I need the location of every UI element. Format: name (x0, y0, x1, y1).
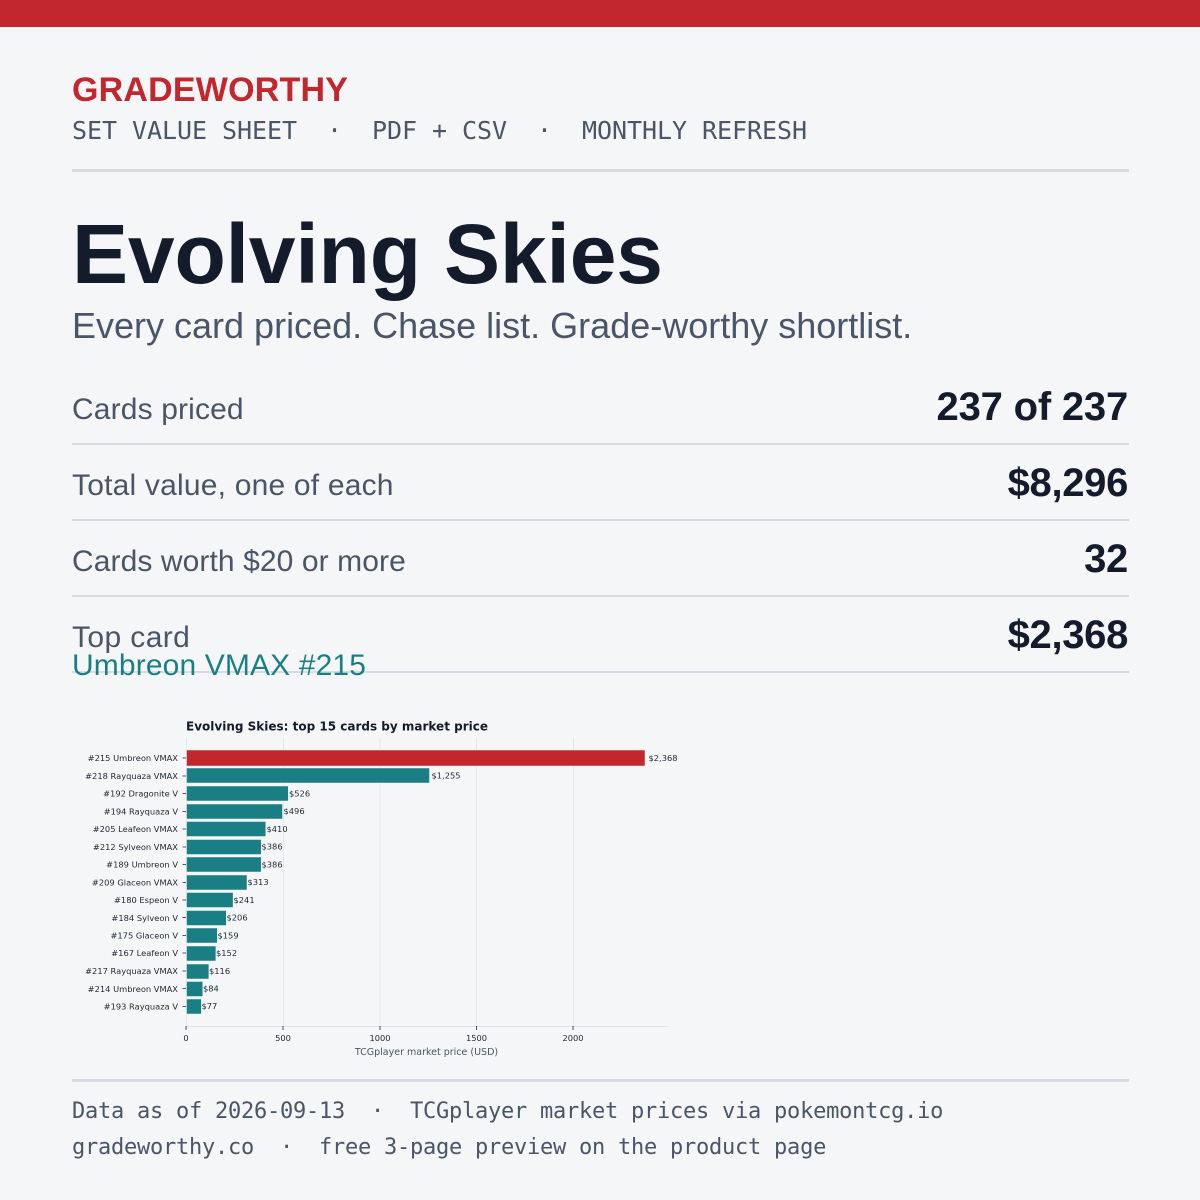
x-axis labels (183, 1033, 584, 1043)
y-axis labels: #180 Espeon V (114, 895, 178, 905)
bar value labels: $496 (284, 806, 305, 816)
bar value labels (202, 753, 678, 1011)
bars (186, 750, 645, 1014)
bar value labels: $410 (266, 824, 288, 834)
stat row: cards worth $20 or more: Cards worth $20 or more (72, 545, 406, 578)
y tick marks (182, 758, 573, 1030)
y-axis labels: #209 Glaceon VMAX (92, 878, 178, 888)
title: Evolving Skies (72, 207, 663, 301)
footer source line: Data as of 2026-09-13 · TCGplayer market prices via pokemontcg.io (72, 1099, 943, 1124)
subtitle: Every card priced. Chase list. Grade-worthy shortlist. (72, 305, 912, 346)
chart title: Evolving Skies: top 15 cards by market price (186, 720, 488, 734)
x-axis labels: 1000 (369, 1033, 391, 1043)
stat row: top card: Top card (72, 621, 190, 654)
bar value labels: $526 (289, 788, 310, 798)
y-axis labels (85, 753, 178, 1012)
bar value labels: $84 (203, 984, 219, 994)
y-axis labels: #194 Rayquaza V (104, 806, 178, 816)
bar value labels: $206 (226, 912, 248, 922)
y-axis labels: #217 Rayquaza VMAX (85, 966, 178, 976)
stat row: cards priced: 237 of 237 (937, 385, 1128, 429)
y-axis labels: #214 Umbreon VMAX (88, 984, 178, 994)
stat row: cards priced: Cards priced (72, 393, 244, 426)
bar value labels: $159 (218, 930, 239, 940)
y-axis labels: #193 Rayquaza V (104, 1002, 178, 1012)
brand name: GRADEWORTHY (72, 71, 348, 109)
bar value labels: $313 (248, 877, 269, 887)
y-axis labels: #175 Glaceon V (110, 930, 178, 940)
footer product line: gradeworthy.co · free 3-page preview on the product page (72, 1135, 826, 1160)
stat row: cards worth $20 or more: 32 (1084, 537, 1128, 581)
bar value labels: $116 (209, 966, 230, 976)
stat row: top card: $2,368 (1008, 613, 1128, 657)
y-axis labels: #212 Sylveon VMAX (93, 842, 178, 852)
header tagline: SET VALUE SHEET · PDF + CSV · MONTHLY REFRESH (72, 116, 807, 145)
y-axis labels: #205 Leafeon VMAX (93, 824, 178, 834)
x-axis labels: 500 (275, 1033, 291, 1043)
y-axis labels: #167 Leafeon V (111, 948, 178, 958)
stat row: top card (72, 613, 1129, 682)
bar value labels: $241 (234, 895, 255, 905)
y-axis labels: #218 Rayquaza VMAX (85, 771, 178, 781)
bar value labels: $2,368 (648, 753, 678, 763)
bar value labels: $77 (202, 1001, 217, 1011)
x-axis labels: 1500 (466, 1033, 487, 1043)
x-axis labels: 0 (183, 1033, 189, 1043)
top accent bar (0, 0, 1200, 27)
y-axis labels: #184 Sylveon V (111, 913, 178, 923)
stat row: cards priced (72, 385, 1129, 445)
bar value labels: $152 (216, 948, 237, 958)
y-axis labels: #189 Umbreon V (106, 860, 178, 870)
x-axis title: TCGplayer market price (USD) (354, 1047, 498, 1058)
bar value labels: $386 (262, 860, 283, 870)
stat row: total value (72, 461, 1129, 521)
stat row: total value: $8,296 (1008, 461, 1128, 505)
bar chart: top 15 cards by market price (85, 720, 678, 1058)
x-axis labels: 2000 (562, 1033, 584, 1043)
stat row: cards worth $20 or more (72, 537, 1129, 597)
bar value labels: $386 (262, 842, 283, 852)
stat row: total value: Total value, one of each (72, 469, 394, 502)
y-axis labels: #192 Dragonite V (103, 788, 178, 798)
bar value labels: $1,255 (432, 770, 461, 780)
stat row: top card: Umbreon VMAX #215 (72, 649, 366, 682)
y-axis labels: #215 Umbreon VMAX (88, 753, 178, 763)
